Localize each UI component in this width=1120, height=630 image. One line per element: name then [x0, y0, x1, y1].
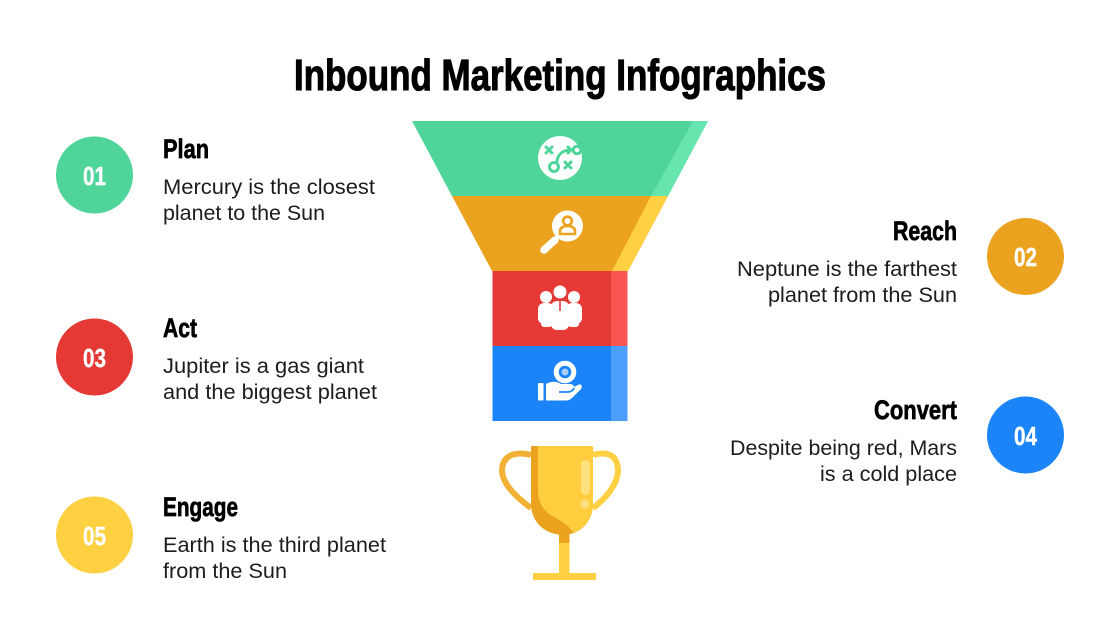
step 01: Plan: planet to the Sun — [163, 201, 325, 225]
step 01: Plan: 01 — [83, 161, 106, 191]
step 02: Reach: Neptune is the farthest — [737, 257, 957, 281]
step 01: Plan — [56, 134, 375, 225]
step 03: Act: Act — [163, 313, 197, 343]
step 01: Plan: Plan — [163, 134, 209, 164]
funnel tier: orange — [452, 196, 668, 271]
icon: hand holding coin — [538, 361, 582, 400]
step 05: Engage — [56, 492, 386, 583]
step 04: Convert — [730, 395, 1064, 486]
step 05: Engage: from the Sun — [163, 559, 287, 583]
title: Inbound Marketing Infographics — [294, 51, 826, 100]
funnel tier: red — [492, 271, 628, 346]
step 02: Reach — [737, 216, 1064, 307]
step 03: Act: and the biggest planet — [163, 380, 377, 404]
icon: trophy — [502, 446, 618, 580]
step 05: Engage: Earth is the third planet — [163, 533, 386, 557]
step 02: Reach: planet from the Sun — [768, 283, 957, 307]
step 02: Reach: Reach — [893, 216, 957, 246]
step 05: Engage: Engage — [163, 492, 238, 522]
step 04: Convert: is a cold place — [820, 462, 957, 486]
icon: team of people — [538, 286, 582, 330]
step 04: Convert: Despite being red, Mars — [730, 436, 957, 460]
step 04: Convert: 04 — [1014, 421, 1037, 451]
step 02: Reach: 02 — [1014, 242, 1037, 272]
funnel tier: green — [412, 121, 708, 196]
step 03: Act: 03 — [83, 343, 106, 373]
step 05: Engage: 05 — [83, 521, 106, 551]
step 01: Plan: Mercury is the closest — [163, 175, 375, 199]
step 03: Act: Jupiter is a gas giant — [163, 354, 364, 378]
funnel — [412, 121, 708, 421]
icon: strategy plan — [538, 136, 582, 180]
funnel tier: blue — [492, 346, 628, 421]
step 03: Act — [56, 313, 377, 404]
icon: magnifier with user — [544, 210, 583, 250]
step 04: Convert: Convert — [874, 395, 957, 425]
